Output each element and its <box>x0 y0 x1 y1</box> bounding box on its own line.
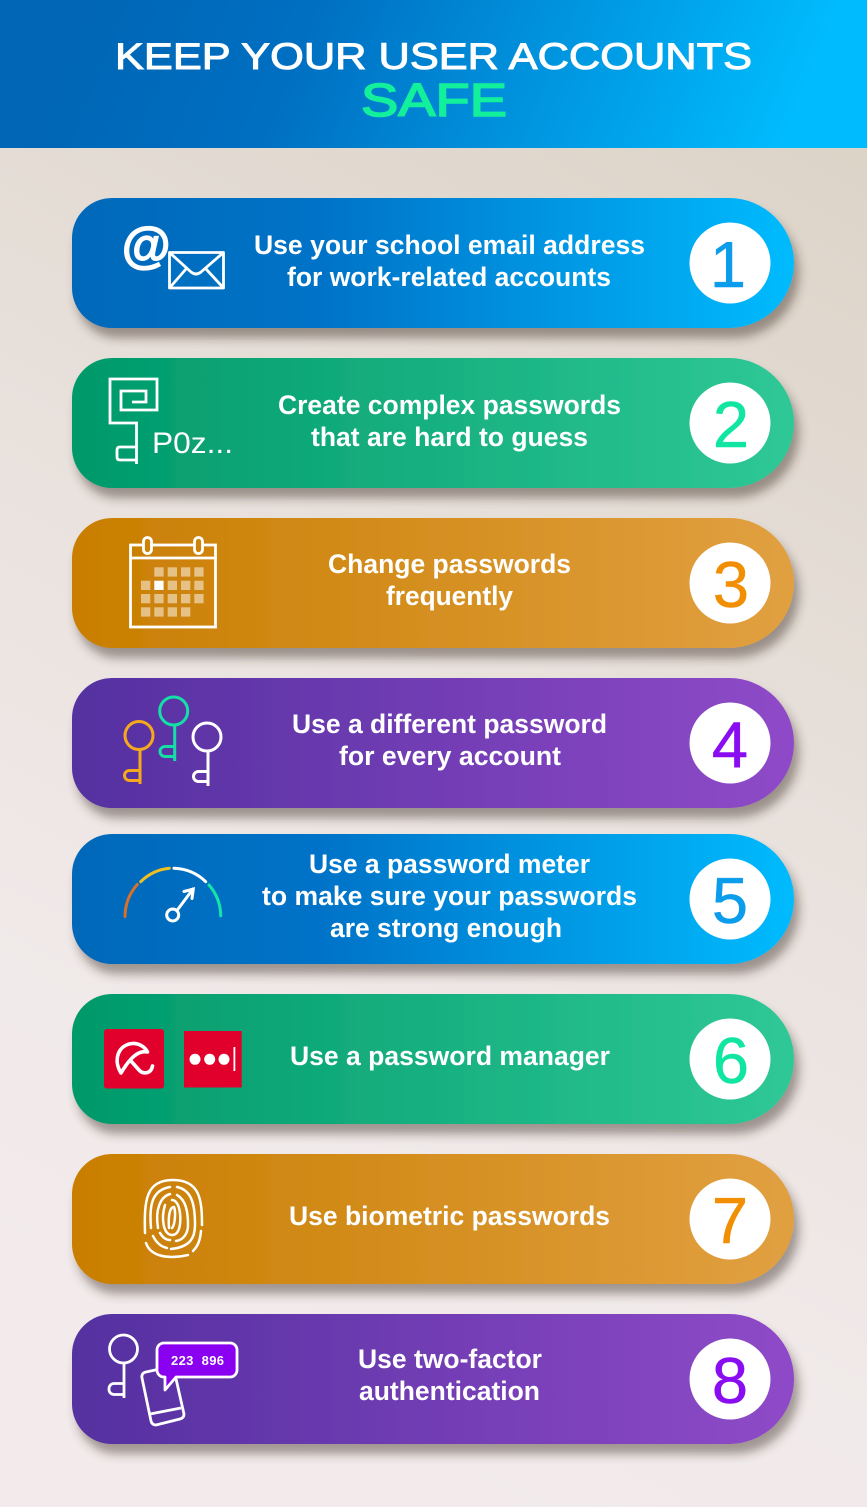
step 5 text: are strong enough <box>330 913 562 943</box>
step 7 text: Use biometric passwords <box>289 1201 610 1231</box>
panel: step 1 email <box>72 198 794 328</box>
number badge 7: 7 <box>712 1184 748 1257</box>
panel: step 7 biometric <box>72 1154 794 1284</box>
number badge 1 <box>690 222 770 304</box>
icon: key <box>109 1335 138 1398</box>
step 4 text: Use a different password <box>292 709 607 739</box>
step 4 text: for every account <box>339 741 561 771</box>
step 2 text: that are hard to guess <box>311 422 588 452</box>
panel: step 8 two-factor <box>72 1314 794 1444</box>
step 3 text: Change passwords <box>328 549 571 579</box>
panel: step 4 different passwords <box>72 678 794 808</box>
number badge 8 <box>690 1338 770 1420</box>
header banner <box>0 0 867 148</box>
number badge 4: 4 <box>712 708 748 781</box>
number badge 1: 1 <box>710 228 746 301</box>
icon: fingerprint <box>145 1180 202 1257</box>
step 2 text: Create complex passwords <box>278 390 621 420</box>
icon: calendar <box>130 538 216 627</box>
icon: red umbrella logo <box>104 1029 164 1088</box>
panel: step 3 change passwords <box>72 518 794 648</box>
icon: email: @ <box>121 218 170 274</box>
panel: step 5 password meter <box>72 834 794 964</box>
number badge 3 <box>690 542 770 624</box>
number badge 5: 5 <box>712 864 748 937</box>
step 3 text: frequently <box>386 581 513 611</box>
number badge 2 <box>690 382 770 464</box>
title line: KEEP YOUR USER ACCOUNTS <box>115 36 752 77</box>
step 6 text: Use a password manager <box>290 1041 610 1071</box>
icon: three keys <box>124 697 221 786</box>
number badge 7 <box>690 1178 770 1260</box>
icon: key with password: P0z... <box>152 427 233 460</box>
number badge 3: 3 <box>713 548 749 621</box>
panel: step 6 password manager <box>72 994 794 1124</box>
number badge 4 <box>690 702 770 784</box>
icon: phone with code bubble <box>142 1343 237 1425</box>
step 5 text: to make sure your passwords <box>262 881 637 911</box>
icon: password meter <box>125 868 221 921</box>
step 1 text: for work-related accounts <box>287 262 611 292</box>
panel: step 2 complex passwords <box>72 358 794 488</box>
step 8 text: authentication <box>359 1376 540 1406</box>
step 5 text: Use a password meter <box>309 849 590 879</box>
step 1 text: Use your school email address <box>254 230 645 260</box>
number badge 5 <box>690 858 770 940</box>
icon: key with password <box>110 379 233 464</box>
number badge 2: 2 <box>713 388 749 461</box>
step 8 text: Use two-factor <box>358 1344 542 1374</box>
title accent word: SAFE <box>361 74 507 126</box>
verification code: 223 896 <box>171 1353 224 1368</box>
icon: email <box>121 218 224 288</box>
number badge 8: 8 <box>712 1344 748 1417</box>
icon: red dots logo <box>184 1031 242 1088</box>
number badge 6 <box>690 1018 770 1100</box>
number badge 6: 6 <box>713 1024 749 1097</box>
